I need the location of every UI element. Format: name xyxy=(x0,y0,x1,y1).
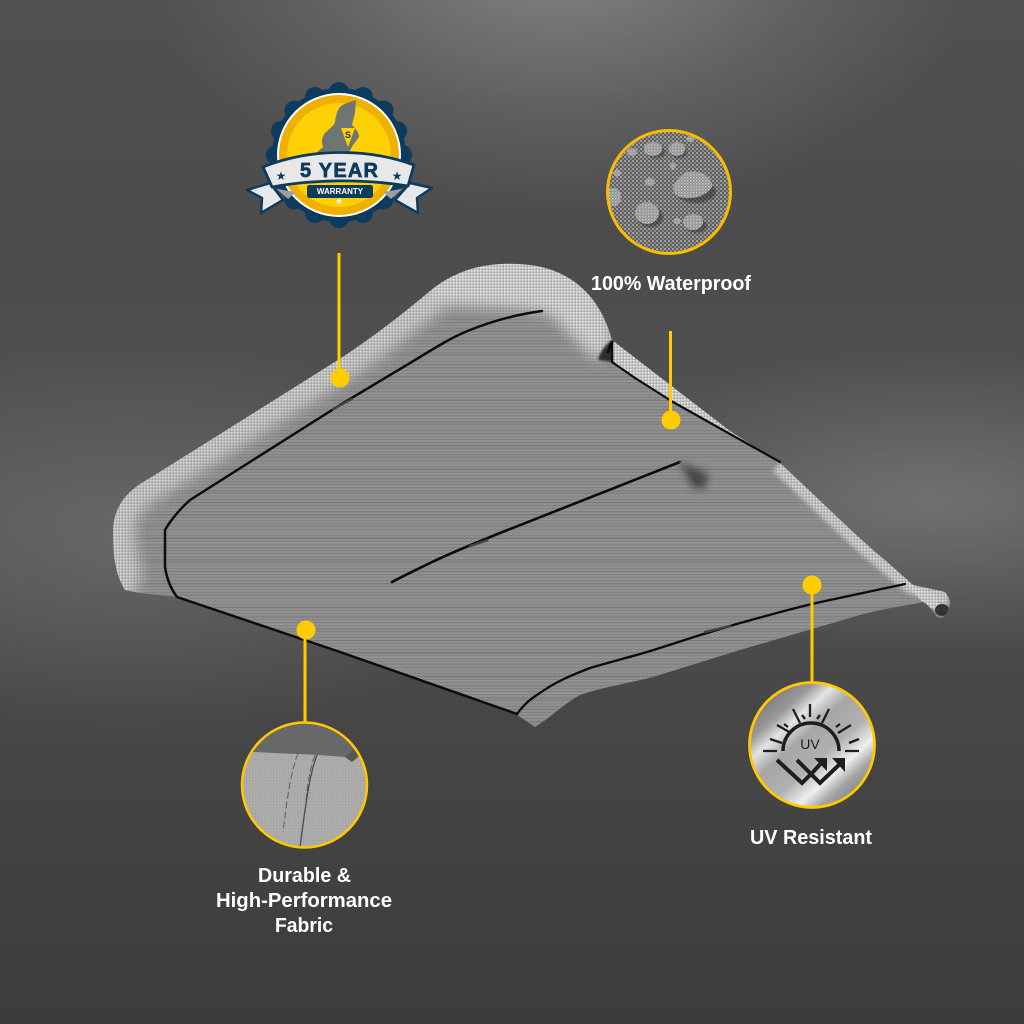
warranty tag xyxy=(307,185,373,198)
ribbon tails xyxy=(247,183,283,213)
icon: sun and arrows xyxy=(763,704,859,783)
label: fabric: Fabric xyxy=(275,915,333,937)
badge scalloped seal xyxy=(266,82,412,228)
label: waterproof: 100% Waterproof xyxy=(591,273,751,295)
seam lines xyxy=(165,311,905,714)
connector: waterproof xyxy=(662,331,680,430)
circle: water droplets on fabric xyxy=(606,129,732,255)
truck cover product xyxy=(100,250,960,740)
connector: fabric xyxy=(296,620,316,723)
badge: 5 year warranty: S xyxy=(345,130,351,140)
badge: 5 year warranty: ★ xyxy=(392,169,402,183)
seal mascot xyxy=(315,100,359,154)
connector: warranty xyxy=(330,253,350,388)
badge: 5 year warranty: 5 YEAR xyxy=(300,160,379,182)
badge: 5 year warranty: WARRANTY xyxy=(317,187,364,196)
label: fabric: Durable & xyxy=(258,865,351,887)
circle: stitched fabric xyxy=(240,720,372,850)
mascot chest emblem xyxy=(341,128,355,147)
circle: UV icon: UV xyxy=(800,736,820,752)
label: UV resistant: UV Resistant xyxy=(750,827,872,849)
label: fabric: High-Performance xyxy=(216,890,392,912)
label: fabric xyxy=(216,865,392,937)
ribbon banner xyxy=(263,152,414,187)
badge: 5 year warranty: ★ xyxy=(335,196,343,206)
ribbon stars: ★ xyxy=(276,169,286,183)
circle: UV icon xyxy=(750,682,874,808)
badge: 5 year warranty xyxy=(247,82,432,228)
connector: UV xyxy=(802,576,822,684)
